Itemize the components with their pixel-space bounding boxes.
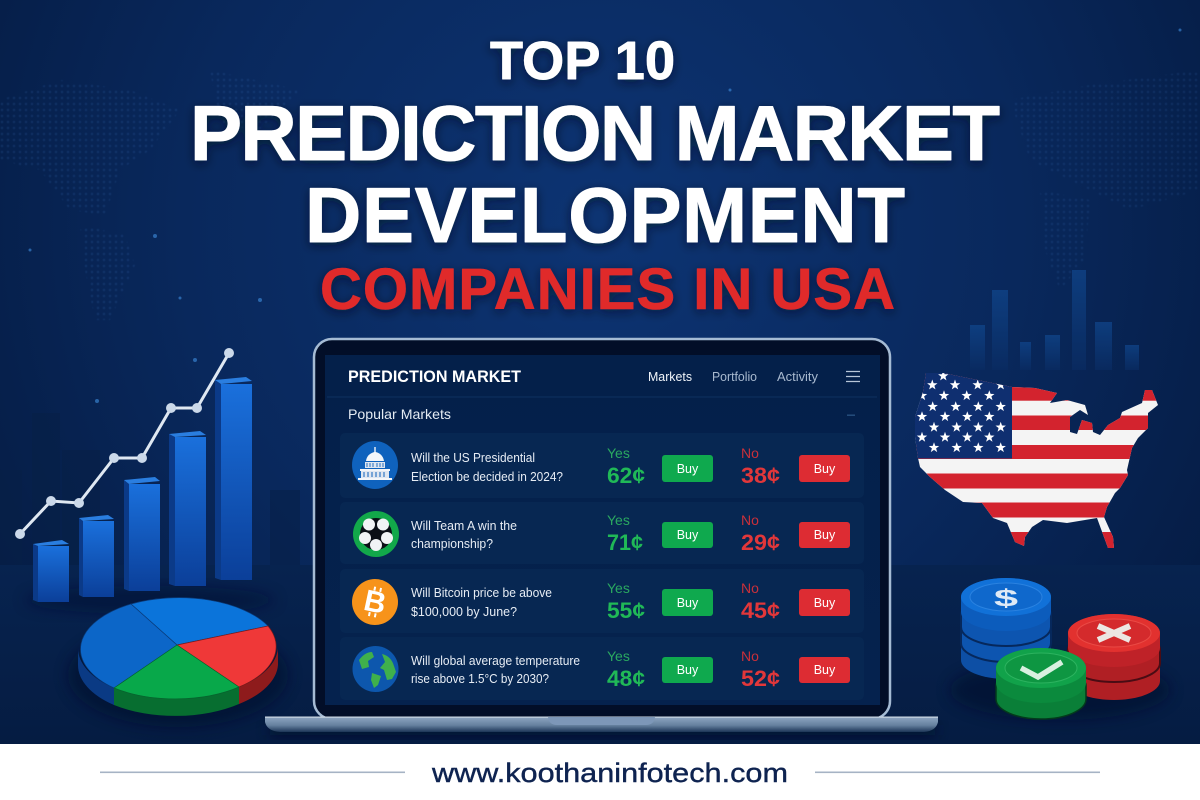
network dots xyxy=(28,28,1182,403)
no buy button: Buy xyxy=(814,462,836,476)
dotted world map right xyxy=(1010,70,1200,290)
yes price: Yes xyxy=(607,580,630,596)
yes price: 55¢ xyxy=(607,598,645,623)
pie slice: red xyxy=(177,626,276,687)
yes buy button: Buy xyxy=(677,596,699,610)
no buy button xyxy=(799,657,850,683)
no price xyxy=(741,580,780,623)
no buy button xyxy=(799,455,850,482)
icon: cross xyxy=(1098,626,1130,640)
coin stacks xyxy=(950,578,1170,720)
laptop base xyxy=(265,716,938,732)
yes price: 48¢ xyxy=(607,666,645,691)
no buy button: Buy xyxy=(814,596,836,610)
no price: No xyxy=(741,512,759,528)
icon: earth xyxy=(352,646,398,692)
flag canton xyxy=(915,373,1012,458)
pie slice: green xyxy=(114,645,239,699)
no buy button xyxy=(799,522,850,548)
no price: 52¢ xyxy=(741,666,780,691)
icon: bitcoin xyxy=(352,579,398,625)
yes buy button xyxy=(662,657,713,683)
question text: Election be decided in 2024? xyxy=(411,470,563,484)
laptop bezel xyxy=(314,339,890,719)
nav: activity: Activity xyxy=(777,370,819,384)
pie side walls xyxy=(78,648,114,705)
question text: rise above 1.5°C by 2030? xyxy=(411,672,549,686)
red coin stack xyxy=(1068,614,1160,700)
yes buy button xyxy=(662,455,713,482)
no price: 38¢ xyxy=(741,463,780,488)
pie slice: blue left xyxy=(81,604,177,688)
dotted world map left xyxy=(0,70,300,320)
no price xyxy=(741,648,780,691)
no price xyxy=(741,512,780,555)
nav: markets: Markets xyxy=(648,370,692,384)
question text: Will Team A win the xyxy=(411,519,517,533)
no price: 29¢ xyxy=(741,530,780,555)
yes price xyxy=(607,648,645,691)
yes price: Yes xyxy=(607,445,630,461)
green coin stack xyxy=(996,648,1086,719)
title line: prediction market: PREDICTION MARKET xyxy=(190,89,1000,177)
skyline right xyxy=(970,270,1139,370)
blue coin stack xyxy=(961,578,1051,679)
bars xyxy=(25,377,275,614)
bar chart with trend line xyxy=(15,348,275,614)
no buy button: Buy xyxy=(814,528,836,542)
app brand: PREDICTION MARKET xyxy=(348,368,521,386)
footer xyxy=(0,744,1200,800)
yes price: Yes xyxy=(607,512,630,528)
no buy button: Buy xyxy=(814,663,836,677)
no price: No xyxy=(741,580,759,596)
market row: bitcoin xyxy=(340,569,864,633)
website url: www.koothaninfotech.com xyxy=(431,758,788,788)
skyline left xyxy=(0,413,300,565)
yes buy button: Buy xyxy=(677,462,699,476)
icon: bitcoin: B xyxy=(361,584,389,621)
no buy button xyxy=(799,589,850,616)
no price: No xyxy=(741,445,759,461)
question text: $100,000 by June? xyxy=(411,605,517,619)
market row: championship xyxy=(340,502,864,564)
question text: Will the US Presidential xyxy=(411,451,535,465)
pie slice: blue top xyxy=(131,598,268,645)
icon: check mark xyxy=(1021,662,1062,677)
usa flag map xyxy=(915,373,1158,548)
yes buy button: Buy xyxy=(677,528,699,542)
laptop shadow xyxy=(270,724,935,736)
no price: 45¢ xyxy=(741,598,780,623)
question text: championship? xyxy=(411,537,493,551)
question text: Will global average temperature xyxy=(411,654,580,668)
section heading: popular markets: Popular Markets xyxy=(348,406,451,422)
title line: top 10: TOP 10 xyxy=(490,31,675,91)
icon: dollar sign: $ xyxy=(994,585,1018,611)
title line: development: DEVELOPMENT xyxy=(305,171,905,259)
pie chart xyxy=(68,598,288,727)
trend line xyxy=(15,348,234,539)
icon: capitol xyxy=(352,441,398,489)
yes price xyxy=(607,512,643,555)
no price: No xyxy=(741,648,759,664)
yes buy button xyxy=(662,522,713,548)
yes buy button: Buy xyxy=(677,663,699,677)
laptop xyxy=(265,339,938,736)
market row: temperature xyxy=(340,637,864,700)
yes price xyxy=(607,445,645,488)
yes price: 62¢ xyxy=(607,463,645,488)
no price xyxy=(741,445,780,488)
yes price xyxy=(607,580,645,623)
nav: portfolio: Portfolio xyxy=(712,370,757,384)
app header xyxy=(348,368,860,386)
market row: us election xyxy=(340,433,864,498)
yes price: 71¢ xyxy=(607,530,643,555)
title line: companies in usa: COMPANIES IN USA xyxy=(320,257,895,322)
laptop display xyxy=(325,355,880,705)
yes price: Yes xyxy=(607,648,630,664)
question text: Will Bitcoin price be above xyxy=(411,586,552,600)
yes buy button xyxy=(662,589,713,616)
icon: hamburger menu xyxy=(846,372,860,382)
icon: soccer ball xyxy=(353,511,399,557)
title xyxy=(190,31,1000,322)
